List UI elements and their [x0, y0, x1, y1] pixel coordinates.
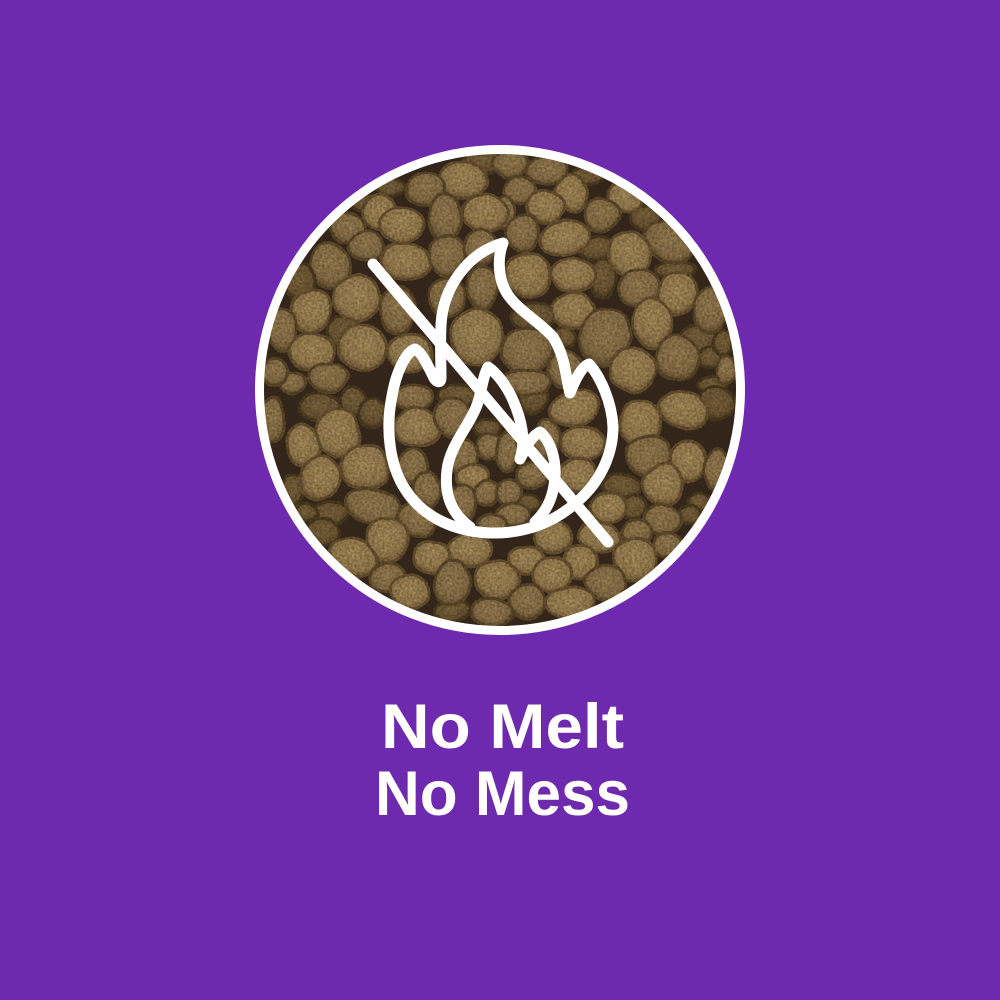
panel: circular kibble photo: [259, 149, 740, 630]
slash line: [373, 264, 608, 542]
title line 2: No Mess: [375, 759, 630, 829]
white ring: [260, 150, 740, 630]
flame outer outline: [389, 243, 613, 533]
kibble texture: [259, 149, 737, 626]
flame inner outline: [446, 367, 555, 527]
title line 1: No Melt: [381, 692, 624, 762]
title: [375, 692, 630, 829]
icon: crossed-out flame: [373, 243, 613, 542]
